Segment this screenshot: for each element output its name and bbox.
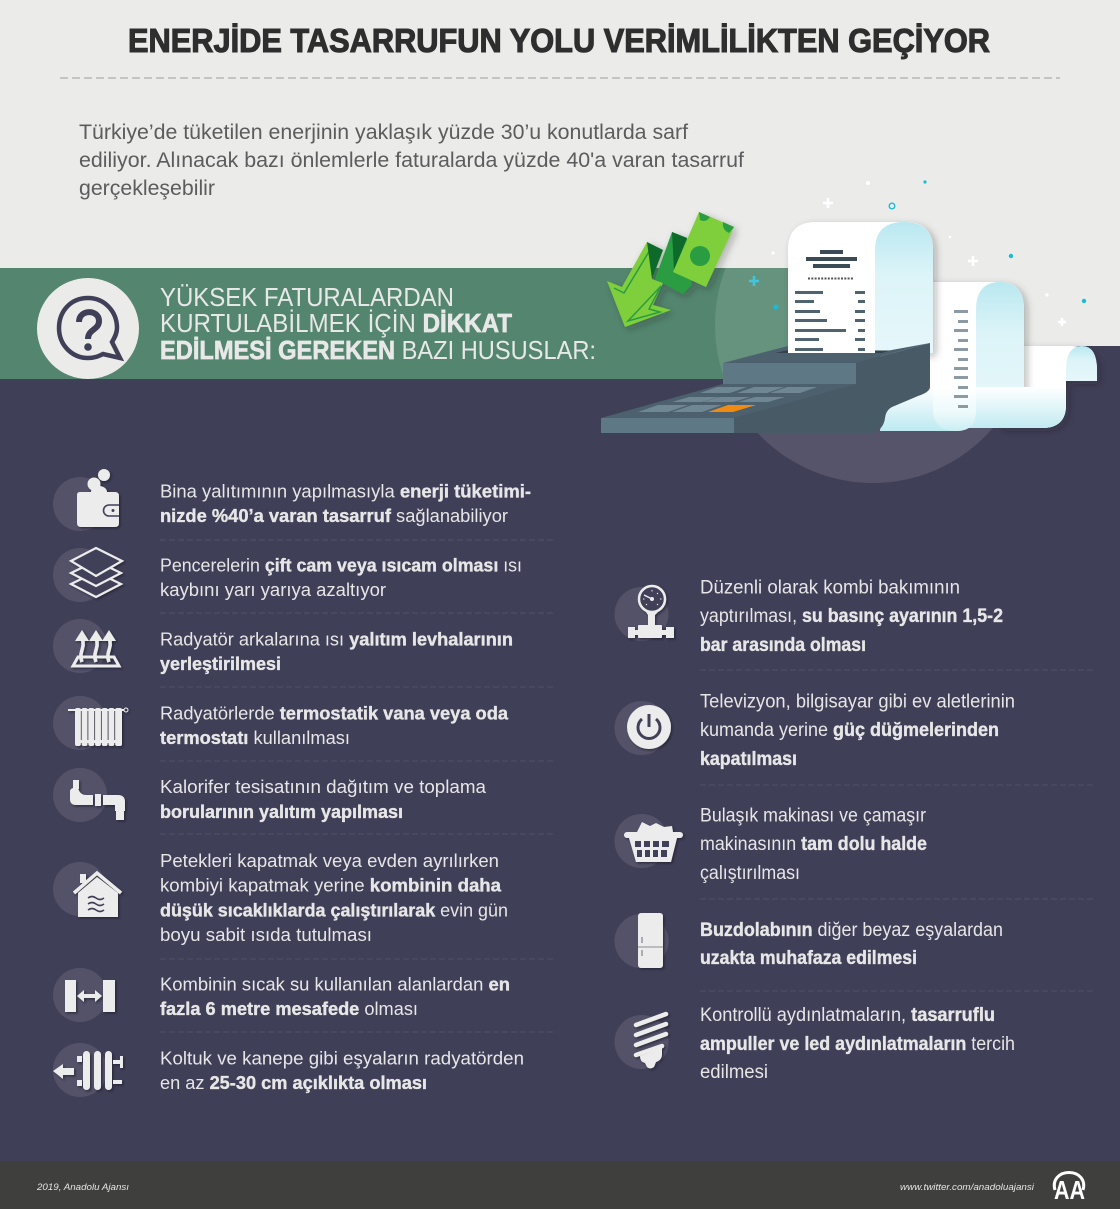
item: power buttons xyxy=(614,692,1015,770)
item: power buttons: Televizyon, bilgisayar gibi ev aletlerinin xyxy=(700,692,1015,712)
item: double glazing: kaybını yarı yarıya azaltıyor xyxy=(160,579,386,600)
banner text: YÜKSEK FATURALARDAN xyxy=(160,282,454,312)
item: wallet xyxy=(53,469,531,531)
title: ENERJİDE TASARRUFUN YOLU VERİMLİLİKTEN GEÇİYOR xyxy=(128,22,990,59)
item: distance: fazla 6 metre mesafede olması xyxy=(160,998,418,1019)
footer xyxy=(36,1172,1085,1205)
footer: 2019, Anadolu Ajansı xyxy=(36,1182,129,1193)
item: boiler maintenance: yaptırılması, su basınç ayarının 1,5-2 xyxy=(700,606,1003,627)
calculator xyxy=(601,343,930,433)
item: power buttons: kumanda yerine güç düğmelerinden xyxy=(700,720,999,741)
item: lighting: Kontrollü aydınlatmaların, tasarruflu xyxy=(700,1005,995,1026)
item: full load washing: çalıştırılması xyxy=(700,863,800,884)
item: wallet: Bina yalıtımının yapılmasıyla enerji tüketimi- xyxy=(160,480,531,502)
item: lighting: edilmesi xyxy=(700,1062,768,1083)
icon: distance arrow xyxy=(65,980,115,1012)
item: boiler maintenance: bar arasında olması xyxy=(700,635,866,656)
item: wallet: nizde %40’a varan tasarruf sağlanabiliyor xyxy=(160,505,508,526)
item: refrigerator: Buzdolabının diğer beyaz eşyalardan xyxy=(700,920,1003,941)
item: furniture clearance xyxy=(53,1043,524,1097)
item: double glazing: Pencerelerin çift cam veya ısıcam olması ısı xyxy=(160,554,522,576)
intro text: ediliyor. Alınacak bazı önlemlerle faturalarda yüzde 40'a varan tasarruf xyxy=(79,149,744,172)
icon: AA logo: AA xyxy=(1054,1175,1085,1205)
item: thermostat: Radyatörlerde termostatik vana veya oda xyxy=(160,702,509,724)
item: refrigerator xyxy=(614,913,1003,969)
banner text: EDİLMESİ GEREKEN BAZI HUSUSLAR: xyxy=(160,335,596,365)
banner text: KURTULABİLMEK İÇİN DİKKAT xyxy=(160,308,512,338)
icon: falling money arrow xyxy=(607,212,734,327)
front receipt xyxy=(788,222,933,353)
banner text xyxy=(160,282,596,365)
item: pipes: Kalorifer tesisatının dağıtım ve toplama xyxy=(160,776,487,797)
icon: energy saving bulb xyxy=(636,1014,666,1068)
item: furniture clearance: Koltuk ve kanepe gibi eşyaların radyatörden xyxy=(160,1048,524,1068)
receipt lower shading xyxy=(880,387,1066,431)
icon: question bubble xyxy=(37,278,139,379)
item: constant temperature: düşük sıcaklıklarda çalıştırılarak evin gün xyxy=(160,900,508,920)
icon: pressure gauge xyxy=(628,586,674,638)
item: distance: Kombinin sıcak su kullanılan alanlardan en xyxy=(160,974,510,994)
icon: laundry basket xyxy=(624,822,683,862)
item: full load washing xyxy=(614,806,927,884)
item: pipes: borularının yalıtım yapılması xyxy=(160,801,403,822)
item: pipes xyxy=(53,768,487,822)
icon: wallet xyxy=(77,469,119,527)
icon: pipe xyxy=(70,780,125,820)
item: constant temperature: boyu sabit ısıda tutulması xyxy=(160,924,372,945)
icon: radiator xyxy=(68,708,128,746)
item: full load washing: Bulaşık makinası ve çamaşır xyxy=(700,806,927,826)
item: power buttons: kapatılması xyxy=(700,749,797,770)
item: boiler maintenance xyxy=(614,578,1003,656)
item: boiler maintenance: Düzenli olarak kombi bakımının xyxy=(700,578,960,598)
icon: refrigerator xyxy=(638,913,663,968)
item: thermostat: termostatı kullanılması xyxy=(160,727,350,748)
icon: radiator clearance xyxy=(53,1051,123,1090)
item: full load washing: makinasının tam dolu halde xyxy=(700,834,927,855)
item: lighting xyxy=(614,1005,1015,1083)
item: radiator insulation: yerleştirilmesi xyxy=(160,653,281,674)
item: thermostat xyxy=(53,696,509,750)
item: lighting: ampuller ve led aydınlatmaların tercih xyxy=(700,1034,1015,1055)
item: constant temperature: Petekleri kapatmak veya evden ayrılırken xyxy=(160,850,499,871)
far receipt fold xyxy=(1000,346,1097,428)
item: constant temperature: kombiyi kapatmak yerine kombinin daha xyxy=(160,874,502,896)
item: refrigerator: uzakta muhafaza edilmesi xyxy=(700,948,917,969)
item: constant temperature xyxy=(53,850,508,945)
item: furniture clearance: en az 25-30 cm açıklıkta olması xyxy=(160,1072,427,1093)
sparkles xyxy=(749,180,1086,326)
background circle xyxy=(715,268,992,483)
icon: power button xyxy=(627,705,671,749)
footer: www.twitter.com/anadoluajansi xyxy=(900,1182,1035,1193)
icon: layers xyxy=(71,548,122,597)
item: radiator insulation xyxy=(53,619,513,674)
icon: house xyxy=(74,873,121,917)
intro text xyxy=(79,121,744,200)
icon: heat arrows xyxy=(73,630,119,666)
section banner xyxy=(37,278,596,379)
item: distance xyxy=(53,968,510,1022)
item: radiator insulation: Radyatör arkalarına ısı yalıtım levhalarının xyxy=(160,628,513,650)
intro text: gerçekleşebilir xyxy=(79,177,215,200)
illustration: receipt and calculator xyxy=(601,167,1097,483)
intro text: Türkiye’de tüketilen enerjinin yaklaşık yüzde 30’u konutlarda sarf xyxy=(79,121,688,144)
middle receipt fold xyxy=(880,282,1024,405)
item: double glazing xyxy=(53,548,522,602)
